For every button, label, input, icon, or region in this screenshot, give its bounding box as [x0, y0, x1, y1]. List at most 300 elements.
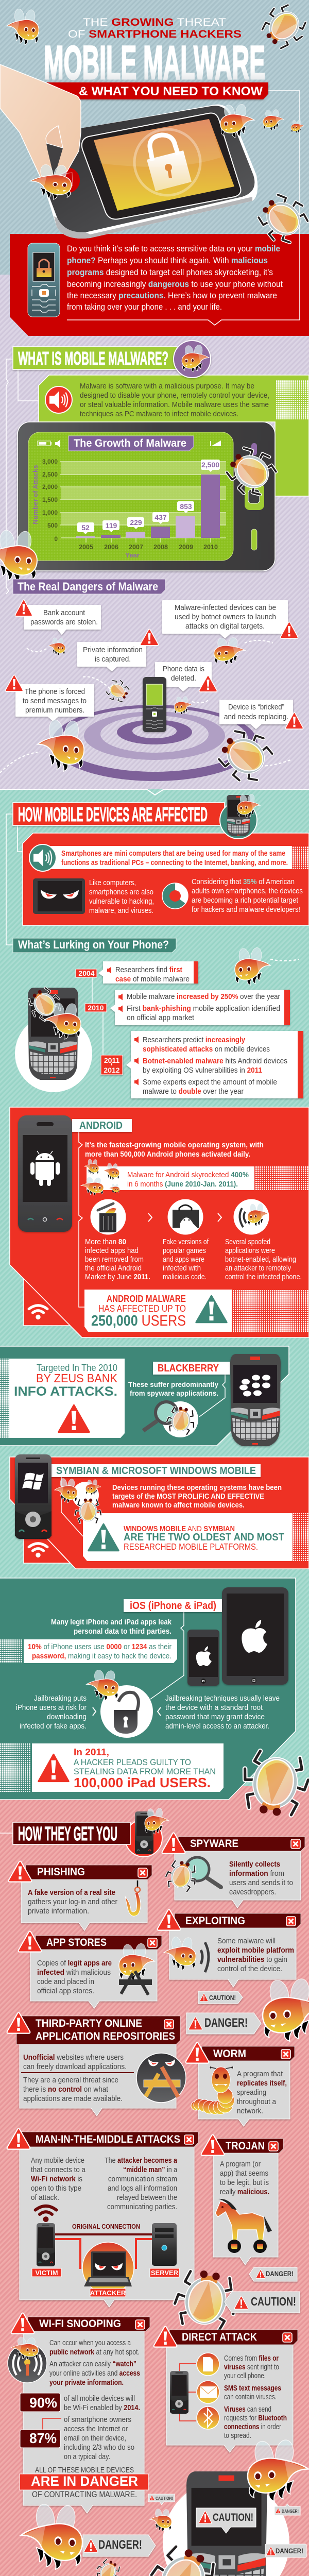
- box: passwords: password, making it easy to hack the device.: [32, 1652, 171, 1660]
- tag: caution trojan: [225, 2292, 300, 2313]
- text: fake versions: infected with: [163, 1264, 201, 1273]
- danger callout: premium: to send messages to: [23, 697, 87, 705]
- card: worm: replicates itself,: [237, 2079, 287, 2088]
- text: apps removed: Market by June 2011.: [85, 1273, 150, 1281]
- ios text: personal data to third parties.: [74, 1627, 171, 1636]
- tag: caution mid: CAUTION!: [209, 1994, 236, 2002]
- bug: smallest bee: [291, 120, 304, 133]
- text: jailbreak right: the device with a standard root: [165, 1703, 263, 1712]
- donut 35 percent: [162, 883, 188, 909]
- bug: chart beetle: [221, 440, 281, 501]
- text: apps removed: the official Android: [85, 1264, 142, 1273]
- x axis labels: 2010: [203, 544, 218, 551]
- text: apps removed: More than 80: [85, 1238, 126, 1246]
- text: jailbreak left: downloading: [47, 1713, 87, 1721]
- text: fake versions: Fake versions of: [163, 1238, 209, 1246]
- text: spoofed apps: applications were: [225, 1246, 275, 1255]
- connector: heading to panel: [18, 369, 39, 401]
- panel: what is malware: [39, 375, 309, 496]
- timeline 2010: 2010: [88, 1004, 104, 1012]
- label: symbian: SYMBIAN & MICROSOFT WINDOWS MOBILE: [56, 1465, 256, 1477]
- danger callout: data deleted: Phone data is: [163, 665, 204, 673]
- text: wifi exposure: Any mobile device: [31, 2156, 84, 2165]
- band: 400 percent: [87, 1166, 309, 1190]
- bug: ios beetle: [238, 1749, 309, 1820]
- icon: exploit bee and arcs: [164, 1936, 209, 1972]
- card: wifi snooping: [8, 2314, 150, 2513]
- timeline 2010: [85, 990, 290, 1025]
- text: spoofed apps: botnet-enabled, allowing: [225, 1255, 296, 1264]
- tag: danger left big: DANGER!: [98, 2538, 142, 2552]
- icon: magnifier beetle: [143, 1401, 198, 1437]
- text: jailbreak right: Jailbreaking techniques usually leave: [165, 1694, 280, 1703]
- timeline 2004: 2004: [78, 969, 95, 977]
- bubble: caution on screen: [196, 2508, 256, 2533]
- text: wifi exposure: [31, 2156, 86, 2202]
- blackberry text: from spyware applications.: [130, 1389, 218, 1397]
- y axis labels: 0: [54, 535, 58, 543]
- android phone: [18, 1115, 72, 1232]
- text: jailbreak left: [16, 1694, 87, 1731]
- diagram: connection: ATTACKER: [90, 2289, 126, 2297]
- hero phone: [47, 105, 258, 239]
- card: spyware: [163, 1834, 305, 1908]
- text: snooping: your online activities and access: [49, 2369, 140, 2378]
- card: trojan: [202, 2136, 283, 2265]
- stat: 87 percent: on a typical day.: [64, 2452, 110, 2461]
- heading: what is mobile malware: WHAT IS MOBILE MALWARE?: [18, 348, 168, 369]
- bug: big beetle: [213, 723, 277, 788]
- text: apps removed: been removed from: [85, 1255, 144, 1264]
- text: direct attack: Viruses can send: [224, 2405, 271, 2414]
- y axis labels: 2,500: [42, 471, 58, 478]
- danger callout: botnet: used by botnet owners to launch: [175, 613, 276, 621]
- chart phone: [18, 422, 281, 571]
- icon: tablet eyes: [33, 878, 85, 914]
- danger callout: bank: passwords are stolen.: [30, 618, 98, 626]
- card: trojan: TROJAN: [226, 2140, 265, 2152]
- intro text: the necessary precautions. Here’s how to prevent malware: [67, 291, 277, 300]
- bug: top right beetle: [256, 0, 309, 54]
- card: spyware: SPYWARE: [190, 1838, 238, 1850]
- intro text: [67, 244, 283, 312]
- background: blue stripes: [0, 0, 309, 275]
- banner: what you need to know: [46, 82, 268, 99]
- bug: top left bee: [7, 8, 39, 45]
- tag: small caution: [148, 2494, 175, 2505]
- text: fake versions: malicious code.: [163, 1273, 207, 1281]
- card: exploiting: EXPLOITING: [185, 1915, 245, 1927]
- danger callout: botnet: Malware-infected devices can be: [175, 603, 276, 612]
- danger callout: private info: Private information: [83, 646, 143, 654]
- y axis labels: 500: [47, 522, 58, 529]
- tag: caution trojan: CAUTION!: [251, 2295, 296, 2308]
- timeline 2011 2012: malware to double over the year: [143, 1087, 244, 1096]
- timeline 2011 2012: sophisticated attacks on mobile devices: [143, 1045, 270, 1054]
- background: pink stripes: [0, 1786, 309, 2576]
- card: direct attack: DIRECT ATTACK: [182, 2331, 257, 2343]
- danger callout: bank: Bank account: [43, 608, 85, 617]
- bug: bee on phone: [220, 104, 254, 138]
- icon: app store bee: [119, 1943, 154, 1995]
- bug: beetle on blackberry: [143, 2539, 224, 2576]
- value labels: 229: [130, 518, 142, 527]
- icon: spy magnifier: [164, 1857, 221, 1893]
- text: middle man: communicating parties.: [107, 2202, 177, 2211]
- title block: [44, 16, 265, 89]
- danger callout: data deleted: [156, 663, 216, 691]
- danger callout: botnet: [163, 601, 297, 638]
- card: spyware: information from: [229, 1869, 284, 1878]
- card: phishing: gathers your log-in and other: [28, 1897, 117, 1906]
- box: 250,000 users: 250,000 USERS: [91, 1313, 186, 1329]
- box: 100,000 users: 100,000 iPad USERS.: [74, 1775, 211, 1790]
- card: app stores: Copies of legit apps are: [37, 1959, 112, 1968]
- icon: rogue app store: [136, 2053, 186, 2103]
- dots: [293, 846, 309, 869]
- card: trojan: app) that seems: [220, 2169, 268, 2178]
- text: jailbreak right: password that may grant device: [165, 1713, 265, 1721]
- text: fake versions: popular games: [163, 1246, 206, 1255]
- box: zeus: INFO ATTACKS.: [14, 1384, 117, 1399]
- ios text: [51, 1618, 172, 1636]
- card: third party: [8, 2014, 186, 2116]
- band bugs: [81, 1159, 119, 1195]
- icon: speaker: [45, 386, 72, 413]
- connector line: [67, 91, 300, 325]
- stat: 87 percent: [20, 2415, 134, 2461]
- text: direct attack: Comes from files or: [224, 2354, 279, 2363]
- text: direct attack: SMS text messages: [224, 2384, 281, 2393]
- phone side buttons: [245, 443, 264, 550]
- bug: big bee top right: [248, 2439, 308, 2501]
- connector: [61, 1477, 83, 1536]
- stat: 87 percent: access the Internet or: [64, 2425, 128, 2433]
- text: devices in danger: [20, 2466, 148, 2499]
- value labels: 437: [154, 513, 167, 521]
- callout band: [42, 846, 292, 869]
- x axis labels: [79, 544, 218, 551]
- card: trojan: to be legit, but is: [220, 2178, 269, 2187]
- tag: danger left big: [83, 2535, 156, 2556]
- blackberry device: [230, 1354, 281, 1446]
- iphone: [187, 1630, 219, 1686]
- bug: small bee three: [174, 696, 192, 715]
- blackberry text: These suffer predominantly: [128, 1380, 218, 1388]
- card: phishing: private information.: [28, 1907, 89, 1916]
- definition text: [80, 382, 269, 418]
- dots: [0, 1359, 9, 1438]
- text: like computers: Like computers,: [89, 878, 136, 887]
- text: thirty five percent: Considering that 35% of American: [192, 877, 295, 886]
- callout text: [61, 849, 288, 867]
- circle: trash: [91, 1199, 126, 1234]
- card: exploiting: [159, 1911, 301, 1987]
- card: wifi snooping: WI-FI SNOOPING: [39, 2318, 121, 2330]
- text: direct attack: to spread.: [224, 2431, 251, 2440]
- bug: big bee mid: [263, 1978, 309, 2041]
- danger callout: private info: is captured.: [95, 655, 131, 664]
- icon: small phone with lock: [28, 243, 60, 317]
- panel: ios: [0, 1578, 296, 1800]
- text: middle man: relayed between the: [117, 2193, 177, 2202]
- text: snooping: An attacker can easily “watch”: [49, 2360, 136, 2368]
- connectors teal: [6, 814, 23, 945]
- text: middle man: “middle man” in a: [123, 2165, 178, 2174]
- bug: big bee at chart: [0, 529, 37, 582]
- x axis title: Year: [125, 551, 140, 559]
- text: like computers: smartphones are also: [89, 888, 153, 896]
- text: devices in danger: ALL OF THESE MOBILE DEVICES: [35, 2466, 134, 2475]
- tag: danger trojan: DANGER!: [266, 2269, 294, 2278]
- card: worm: spreading: [237, 2088, 266, 2097]
- chart: bands: [61, 462, 226, 525]
- card: exploiting: vulnerabilities to gain: [217, 1955, 287, 1964]
- ipad: [222, 1587, 288, 1685]
- illustration: blackberry with bugs: [15, 984, 92, 1092]
- text: spoofed apps: [225, 1238, 302, 1281]
- danger callout: private info: [78, 630, 158, 671]
- bug: small bee: [263, 109, 284, 130]
- diagram: connection: ORIGINAL CONNECTION: [72, 2223, 140, 2230]
- danger callout: bricked: [220, 700, 302, 728]
- bug: small beetle left: [21, 2574, 56, 2576]
- tag: danger right: [265, 2544, 306, 2557]
- bug: jailbreak bee: [87, 1669, 118, 1700]
- text: snooping: Can occur when you access a: [49, 2338, 131, 2347]
- y axis title: Number of Attacks: [31, 465, 39, 524]
- card: app stores: official app stores.: [37, 1987, 94, 1995]
- text: direct attack: connections in order: [224, 2422, 281, 2431]
- title line one: THE GROWING THREAT: [83, 16, 226, 28]
- windows phone: [15, 1454, 52, 1539]
- panel: intro red: [10, 91, 309, 336]
- text: jailbreak left: iPhone users at risk for: [16, 1703, 87, 1712]
- diagram: connection: SERVER: [151, 2269, 179, 2277]
- danger callout: botnet: attacks on digital targets.: [185, 622, 265, 631]
- background: teal stripes: [0, 789, 309, 1786]
- box: 250,000 users: ANDROID MALWARE: [107, 1294, 186, 1304]
- bug: small bee one: [48, 637, 65, 655]
- card: app stores: APP STORES: [46, 1937, 107, 1948]
- icon: centre phone: [143, 677, 166, 732]
- danger callout: data deleted: deleted.: [171, 674, 196, 683]
- text: fake versions: [163, 1238, 209, 1281]
- value tags: [77, 460, 220, 534]
- stat: 87 percent: of smartphone owners: [64, 2415, 131, 2424]
- hand pinching bug: [0, 64, 81, 187]
- text: apps removed: infected apps had: [85, 1246, 139, 1255]
- wifi tab: [24, 1514, 70, 1563]
- definition text: techniques as PC malware to infect mobile devices.: [80, 410, 238, 418]
- card: phishing: PHISHING: [37, 1866, 85, 1878]
- card: exploiting: Some malware will: [217, 1937, 276, 1945]
- card: exploiting: control of the device.: [217, 1964, 282, 1973]
- icon: bluetooth circle: [197, 2406, 219, 2429]
- android intro text: It’s the fastest-growing mobile operating system, with: [85, 1141, 264, 1149]
- bug: lower beetle: [252, 188, 309, 249]
- stat: 87 percent: including 2/3 who do so: [64, 2443, 134, 2452]
- tag: danger mid: [186, 2013, 261, 2034]
- text: fake versions: and apps were: [163, 1255, 204, 1264]
- card: app stores: [20, 1933, 162, 2008]
- timeline 2010: on official app market: [127, 1013, 195, 1022]
- bug: big bee four: [38, 719, 84, 771]
- card: phishing: [10, 1862, 152, 1930]
- circle: signal bee: [234, 1199, 269, 1234]
- bug: bee two: [214, 637, 245, 665]
- x axis labels: 2007: [129, 544, 143, 551]
- value labels: [81, 461, 219, 532]
- label: blackberry: BLACKBERRY: [158, 1363, 219, 1374]
- tag: danger right: DANGER!: [276, 2547, 303, 2555]
- card: third party: applications are made available.: [23, 2094, 123, 2103]
- x axis labels: 2008: [153, 544, 168, 551]
- x axis labels: 2005: [79, 544, 93, 551]
- text: middle man: The attacker becomes a: [105, 2156, 178, 2165]
- timeline 2011 2012: Some experts expect the amount of mobile: [143, 1078, 277, 1087]
- connector: [150, 1612, 184, 1699]
- card: third party: there is no control on what: [23, 2085, 109, 2094]
- text: direct attack: requests for Bluetooth: [224, 2414, 287, 2422]
- icon: trojan horse: [215, 2199, 272, 2253]
- danger callout: premium: premium numbers.: [25, 706, 84, 715]
- stat: 90 percent: [20, 2393, 140, 2412]
- bug trails: [0, 640, 290, 773]
- connector: [199, 1375, 225, 1417]
- icon: phone: [170, 2371, 188, 2414]
- connector: [79, 1132, 84, 1307]
- timeline 2011 2012: 2011: [104, 1056, 119, 1064]
- icon: speaker teal: [29, 844, 56, 871]
- text: direct attack: viruses sent right to: [224, 2363, 279, 2371]
- heading: how mobile devices are affected: [13, 794, 260, 839]
- danger callout: premium: [6, 676, 94, 721]
- target rings: [52, 705, 258, 781]
- box: zeus: [9, 1359, 125, 1438]
- value labels: 52: [81, 523, 90, 532]
- timeline 2010: Mobile malware increased by 250% over the year: [127, 992, 280, 1001]
- text: like computers: malware, and viruses.: [89, 906, 153, 915]
- text: direct attack: your cell phone.: [224, 2371, 266, 2380]
- tag: danger trojan: [249, 2267, 297, 2281]
- connectors: [180, 2364, 196, 2421]
- bubble: caution on screen: CAUTION!: [213, 2512, 253, 2523]
- banner: what you need to know: & WHAT YOU NEED TO KNOW: [79, 84, 263, 98]
- timeline connector: [92, 977, 103, 1055]
- wifi tab: [24, 1279, 70, 1326]
- card: worm: network.: [237, 2107, 263, 2115]
- card: spyware: users and sends it to: [229, 1878, 293, 1887]
- card: man in the middle: [8, 2130, 198, 2307]
- box: oldest platforms: WINDOWS MOBILE AND SYMBIAN: [124, 1525, 235, 1533]
- chevrons: [93, 1707, 161, 1716]
- y axis labels: 1,000: [42, 509, 58, 516]
- stat: 90 percent: be Wi-Fi enabled by 2014.: [64, 2403, 140, 2412]
- intro text: Do you think it’s safe to access sensitive data on your mobile: [67, 244, 280, 253]
- text: wifi exposure: Wi-Fi network is: [31, 2175, 82, 2183]
- text: jailbreak right: [165, 1694, 280, 1731]
- text: snooping: public network at any hot spot.: [49, 2348, 140, 2357]
- text: middle man: and logs all information: [108, 2184, 177, 2193]
- value labels: 853: [180, 502, 192, 511]
- connector: what is malware: [6, 359, 13, 594]
- stat: 90 percent: 90%: [29, 2395, 57, 2411]
- text: jailbreak right: admin-level access to an attacker.: [165, 1722, 269, 1731]
- diagram: connection: VICTIM: [35, 2269, 58, 2277]
- text: snooping: your private information.: [49, 2378, 124, 2387]
- chevrons: [148, 1213, 221, 1222]
- box: oldest platforms: RESEARCHED MOBILE PLATFORMS.: [124, 1541, 258, 1552]
- icon: mail circle: [197, 2381, 219, 2403]
- card: worm: A program that: [237, 2070, 283, 2078]
- x axis labels: 2006: [104, 544, 118, 551]
- y axis labels: [42, 458, 58, 543]
- box: 250,000 users: [84, 1290, 309, 1332]
- intro text: programs designed to target cell phones skyrocketing, it’s: [67, 267, 273, 277]
- box: oldest platforms: ARE THE TWO OLDEST AND MOST: [124, 1532, 284, 1543]
- text: apps removed: [85, 1238, 150, 1281]
- title line two: OF SMARTPHONE HACKERS: [68, 28, 242, 40]
- text: wifi exposure: open to this type: [31, 2184, 81, 2193]
- ios text: Many legit iPhone and iPad apps leak: [51, 1618, 172, 1626]
- bug: small beetle: [104, 677, 132, 705]
- stat: 90 percent: of all mobile devices will: [64, 2394, 135, 2403]
- timeline 2011 2012: Researchers predict increasingly: [143, 1036, 246, 1044]
- stat: 87 percent: 87%: [29, 2430, 57, 2446]
- box: 100,000 users: [0, 1743, 224, 1792]
- tag: small danger: DANGER!: [282, 2509, 299, 2514]
- stat: 87 percent: email on their device,: [64, 2434, 126, 2443]
- definition text: Malware is software with a malicious purpose. It may be: [80, 382, 254, 391]
- bug trail lurking: [270, 959, 299, 961]
- label: ios: iOS (iPhone & iPad): [130, 1600, 216, 1612]
- card: spyware: eavesdroppers.: [229, 1888, 276, 1896]
- label: android: ANDROID: [79, 1120, 123, 1131]
- danger callout: bricked: Device is “bricked”: [228, 703, 284, 711]
- intro text: phone? Perhaps you should think again. With malicious: [67, 256, 268, 265]
- x axis labels: 2009: [179, 544, 193, 551]
- card: third party: can freely download applications.: [23, 2062, 127, 2071]
- box: 250,000 users: HAS AFFECTED UP TO: [98, 1303, 186, 1314]
- blackberry text: [128, 1380, 218, 1397]
- bug: big beetle right: [171, 2266, 240, 2332]
- bug: small bee bottom: [150, 2509, 171, 2531]
- timeline 2011 2012: Botnet-enabled malware hits Android devices: [143, 1057, 287, 1065]
- card: app stores: code and placed in: [37, 1977, 94, 1986]
- card: third party: APPLICATION REPOSITORIES: [36, 2030, 175, 2042]
- card: app stores: infected with malicious: [37, 1968, 111, 1977]
- icon: worm: [191, 2066, 234, 2114]
- panel: symbian: [10, 1454, 309, 1569]
- axis gridlines: [60, 462, 226, 543]
- android intro text: more than 500,000 Android phones activated daily.: [85, 1150, 250, 1159]
- box: 100,000 users: STEALING DATA FROM MORE THAN: [74, 1767, 216, 1776]
- tag: small danger: [274, 2504, 300, 2515]
- heading: how they get you: [0, 1808, 168, 1857]
- danger callout: bricked: and needs replacing.: [224, 713, 288, 721]
- text: devices in danger: OF CONTRACTING MALWARE.: [32, 2489, 137, 2499]
- card: exploiting: exploit mobile platform: [217, 1946, 294, 1955]
- text: spoofed apps: Several spoofed: [225, 1238, 270, 1246]
- y axis labels: 1,500: [42, 496, 58, 503]
- card: third party: Unofficial websites where users: [23, 2053, 124, 2062]
- box: passwords: [0, 1639, 177, 1663]
- box: passwords: 10% of iPhone users use 0000 or 1234 as their: [28, 1642, 171, 1651]
- icon: file circle: [197, 2353, 219, 2376]
- text: thirty five percent: [192, 877, 303, 914]
- tag: caution mid: [198, 1991, 243, 2004]
